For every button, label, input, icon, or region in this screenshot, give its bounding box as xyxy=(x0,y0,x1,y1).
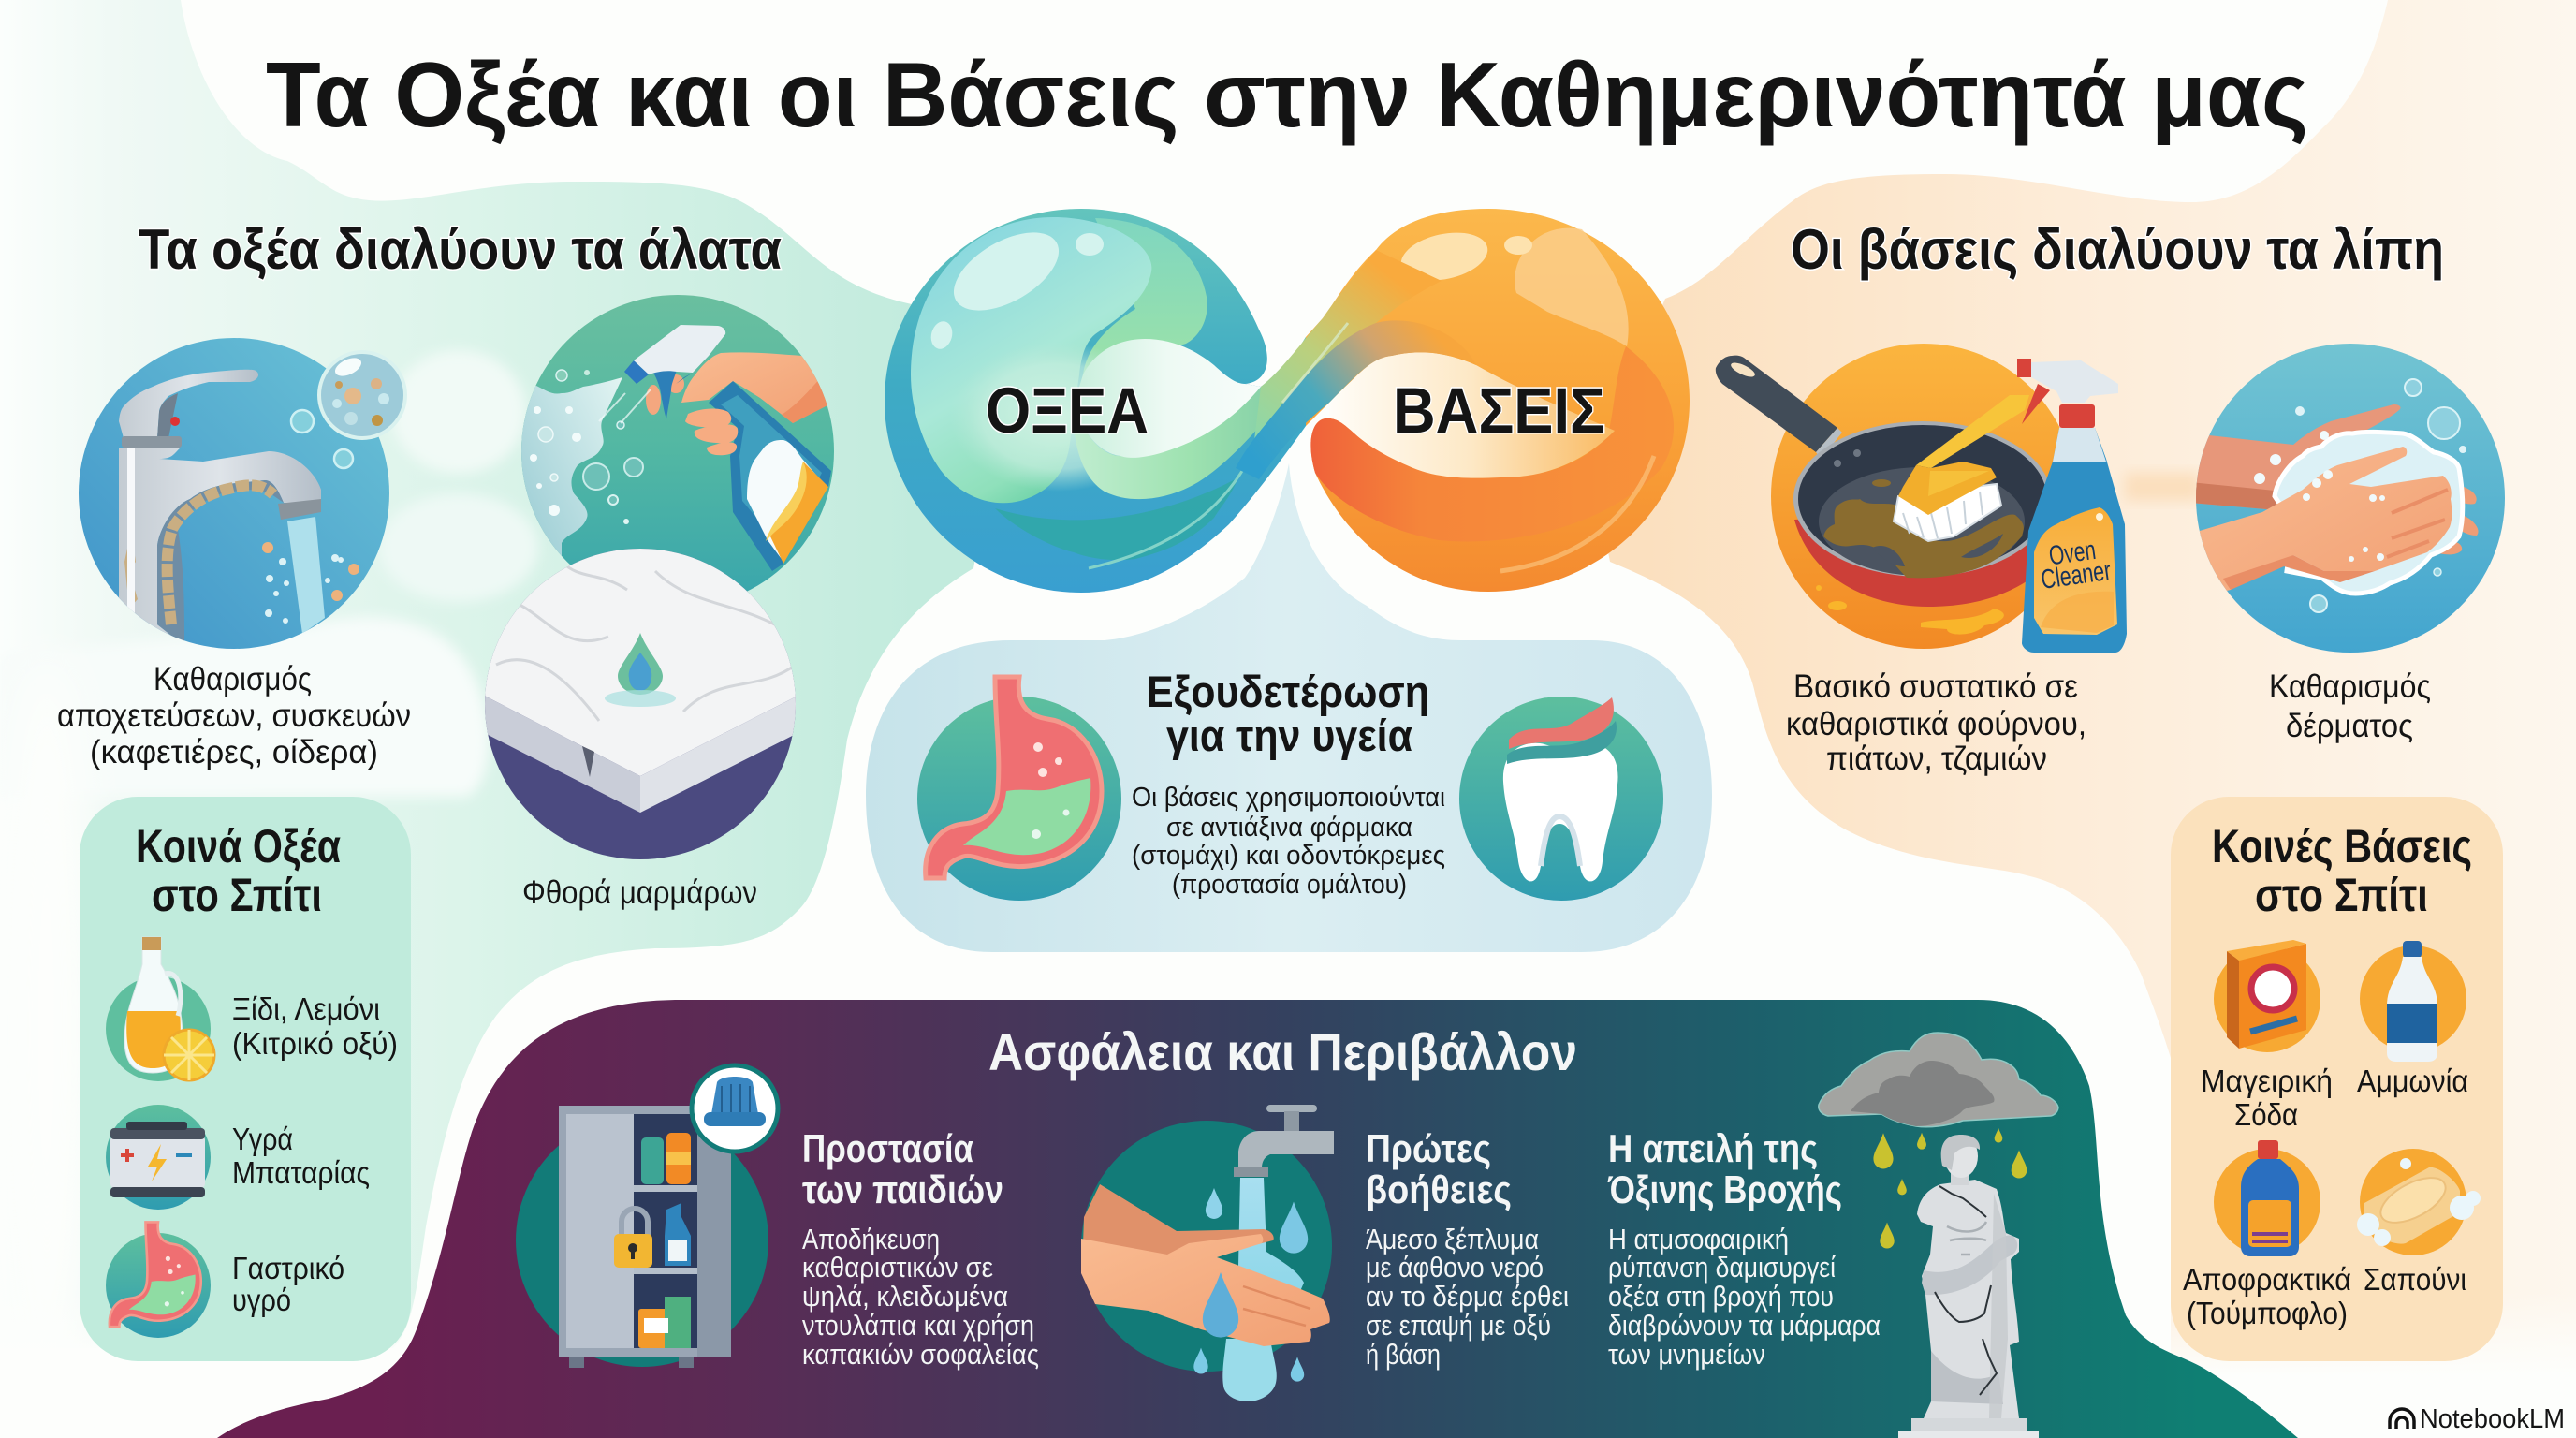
label: drains and appliances xyxy=(57,661,411,770)
text: child protection: ντουλάπια και χρήση xyxy=(802,1309,1034,1342)
text: neutralisation body xyxy=(1132,783,1445,900)
text: first aid: ή βάση xyxy=(1366,1338,1441,1371)
text: baking soda xyxy=(2201,1064,2333,1132)
heading: acids dissolve salts: Τα οξέα διαλύουν τα άλατα xyxy=(139,218,782,281)
text: gastric fluid xyxy=(232,1251,344,1317)
text: acid rain: Η ατμσοφαιρική xyxy=(1608,1223,1789,1255)
illustration: locked cabinet xyxy=(516,1106,768,1368)
panel: common acids at home xyxy=(80,797,411,1361)
heading: first aid xyxy=(1366,1126,1512,1211)
illustration: pan and oven cleaner xyxy=(1716,344,2127,653)
text: soap: Σαπούνι xyxy=(2364,1262,2466,1297)
text: vinegar, lemon: Ξίδι, Λεμόνι xyxy=(232,991,380,1026)
text: first aid: σε επαψή με οξύ xyxy=(1366,1309,1551,1342)
text: neutralisation body: (στομάχι) και οδοντόκρεμες xyxy=(1132,841,1445,871)
label: bases: ΒΑΣΕΙΣ xyxy=(1393,374,1605,447)
heading: common acids xyxy=(136,820,341,921)
label: oven cleaner on bottle xyxy=(2036,534,2113,595)
heading: neutralisation xyxy=(1147,667,1429,760)
icon: tooth with toothpaste xyxy=(1459,697,1663,901)
text: first aid xyxy=(1366,1223,1569,1371)
label: drains and appliances: αποχετεύσεων, συσκευών xyxy=(57,697,411,734)
heading: neutralisation: Εξουδετέρωση xyxy=(1147,667,1429,716)
illustration: acid rain cloud and statue xyxy=(1819,1033,2058,1438)
heading: common acids: στο Σπίτι xyxy=(152,869,322,921)
label: drains and appliances: Καθαρισμός xyxy=(154,661,312,697)
label: drains and appliances: (καφετιέρες, οίδερα) xyxy=(90,734,378,770)
heading: common bases xyxy=(2212,820,2472,921)
text: acid rain xyxy=(1608,1223,1881,1371)
heading: first aid: Πρώτες xyxy=(1366,1126,1491,1170)
panel: common bases at home xyxy=(2171,797,2503,1361)
label: skin cleansing: Καθαρισμός xyxy=(2269,668,2431,705)
heading: common bases: Κοινές Βάσεις xyxy=(2212,820,2472,873)
icon: gastric fluid xyxy=(106,1222,211,1338)
heading: common acids: Κοινά Οξέα xyxy=(136,820,341,873)
illustration: faucet with limescale xyxy=(79,338,405,655)
text: neutralisation body: Οι βάσεις χρησιμοποιούνται xyxy=(1132,783,1445,813)
title: Τα Οξέα και οι Βάσεις στην Καθημερινότητά μας xyxy=(266,43,2308,146)
label: skin cleansing: δέρματος xyxy=(2286,708,2413,744)
text: baking soda: Μαγειρική xyxy=(2201,1064,2333,1098)
text: neutralisation body: (προστασία ομάλτου) xyxy=(1172,870,1407,900)
text: first aid: αν το δέρμα έρθει xyxy=(1366,1280,1569,1313)
icon: cracked statue xyxy=(1898,1135,2039,1438)
text: battery fluid: Υγρά xyxy=(232,1122,293,1156)
text: acid rain: διαβρώνουν τα μάρμαρα xyxy=(1608,1309,1881,1342)
icon: cloud xyxy=(1819,1033,2058,1127)
label: oven cleaner on bottle: Oven xyxy=(2047,536,2098,571)
text: vinegar, lemon xyxy=(232,991,398,1061)
heading: acid rain threat: Όξινης Βροχής xyxy=(1607,1167,1842,1211)
text: vinegar, lemon: (Κιτρικό οξύ) xyxy=(232,1026,398,1061)
heading: bases dissolve fats: Οι βάσεις διαλύουν τα λίπη xyxy=(1791,218,2444,281)
text: drain cleaner: Αποφρακτικά xyxy=(2183,1262,2351,1297)
icon: soap xyxy=(2357,1149,2481,1255)
illustration: marble corrosion xyxy=(485,549,796,859)
text: acid rain: ρύπανση δαμισυργεί xyxy=(1608,1251,1836,1284)
heading: child protection: Προστασία xyxy=(802,1126,973,1170)
text: first aid: με άφθονο νερό xyxy=(1366,1251,1544,1284)
text: first aid: Άμεσο ξέπλυμα xyxy=(1366,1223,1539,1255)
heading: acid rain threat xyxy=(1607,1126,1842,1211)
icon: vinegar and lemon xyxy=(106,937,214,1081)
sphere: acid xyxy=(885,209,1306,593)
text: battery fluid xyxy=(232,1122,370,1190)
illustration: spray bottle xyxy=(520,295,834,608)
icon: stomach xyxy=(917,677,1121,901)
heading: neutralisation: για την υγεία xyxy=(1166,711,1412,760)
sphere: base xyxy=(1306,209,1690,592)
heading: child protection: των παιδιών xyxy=(802,1167,1003,1211)
text: drain cleaner xyxy=(2183,1262,2351,1330)
illustration: rinsing hand under tap xyxy=(1081,1105,1334,1401)
text: gastric fluid: υγρό xyxy=(232,1283,291,1317)
icon: baking soda box xyxy=(2214,940,2320,1052)
label: main ingredient: πιάτων, τζαμιών xyxy=(1826,741,2047,777)
logo: NotebookLM: NotebookLM xyxy=(2420,1404,2565,1434)
heading: safety and environment: Ασφάλεια και Περιβάλλον xyxy=(988,1022,1577,1081)
icon: acid drops xyxy=(1873,1128,2027,1248)
label: marble wear: Φθορά μαρμάρων xyxy=(522,874,757,911)
text: gastric fluid: Γαστρικό xyxy=(232,1251,344,1285)
text: child protection: καπακιών σοφαλείας xyxy=(802,1338,1039,1371)
central acid and base spheres xyxy=(885,209,1690,593)
label: main ingredient: καθαριστικά φούρνου, xyxy=(1786,706,2086,742)
heading: first aid: βοήθειες xyxy=(1366,1167,1512,1211)
icon: safety cap badge xyxy=(692,1065,778,1152)
text: baking soda: Σόδα xyxy=(2234,1097,2298,1132)
text: child protection: Αποδήκευση xyxy=(802,1223,940,1255)
ribbon linking the spheres xyxy=(1236,250,1476,479)
icon: ammonia bottle xyxy=(2360,941,2466,1062)
icon: drain cleaner xyxy=(2214,1140,2320,1256)
label: main ingredient: Βασικό συστατικό σε xyxy=(1793,668,2078,705)
text: child protection: ψηλά, κλειδωμένα xyxy=(802,1280,1008,1313)
illustration: washing hands xyxy=(2190,344,2505,653)
text: neutralisation body: σε αντιάξινα φάρμακα xyxy=(1166,813,1412,843)
background: base area xyxy=(1591,0,2576,1438)
background: acid area xyxy=(0,0,992,1404)
text: battery fluid: Μπαταρίας xyxy=(232,1155,370,1190)
label: acids: ΟΞΕΑ xyxy=(986,374,1149,447)
panel: neutralisation xyxy=(866,463,1712,952)
label: oven cleaner on bottle: Cleaner xyxy=(2040,556,2113,595)
heading: acid rain threat: Η απειλή της xyxy=(1608,1126,1818,1170)
text: child protection: καθαριστικών σε xyxy=(802,1251,993,1284)
label: main ingredient xyxy=(1786,668,2086,777)
text: acid rain: οξέα στη βροχή που xyxy=(1608,1280,1834,1313)
icon: battery xyxy=(106,1105,211,1210)
text: drain cleaner: (Τούμποφλο) xyxy=(2187,1296,2348,1330)
heading: common bases: στο Σπίτι xyxy=(2255,869,2428,921)
label: skin cleansing xyxy=(2269,668,2431,744)
text: ammonia: Αμμωνία xyxy=(2357,1064,2468,1098)
panel: safety and environment xyxy=(217,1000,2298,1438)
heading: child protection xyxy=(802,1126,1003,1211)
text: acid rain: των μνημείων xyxy=(1608,1338,1765,1371)
text: child protection xyxy=(802,1223,1039,1371)
